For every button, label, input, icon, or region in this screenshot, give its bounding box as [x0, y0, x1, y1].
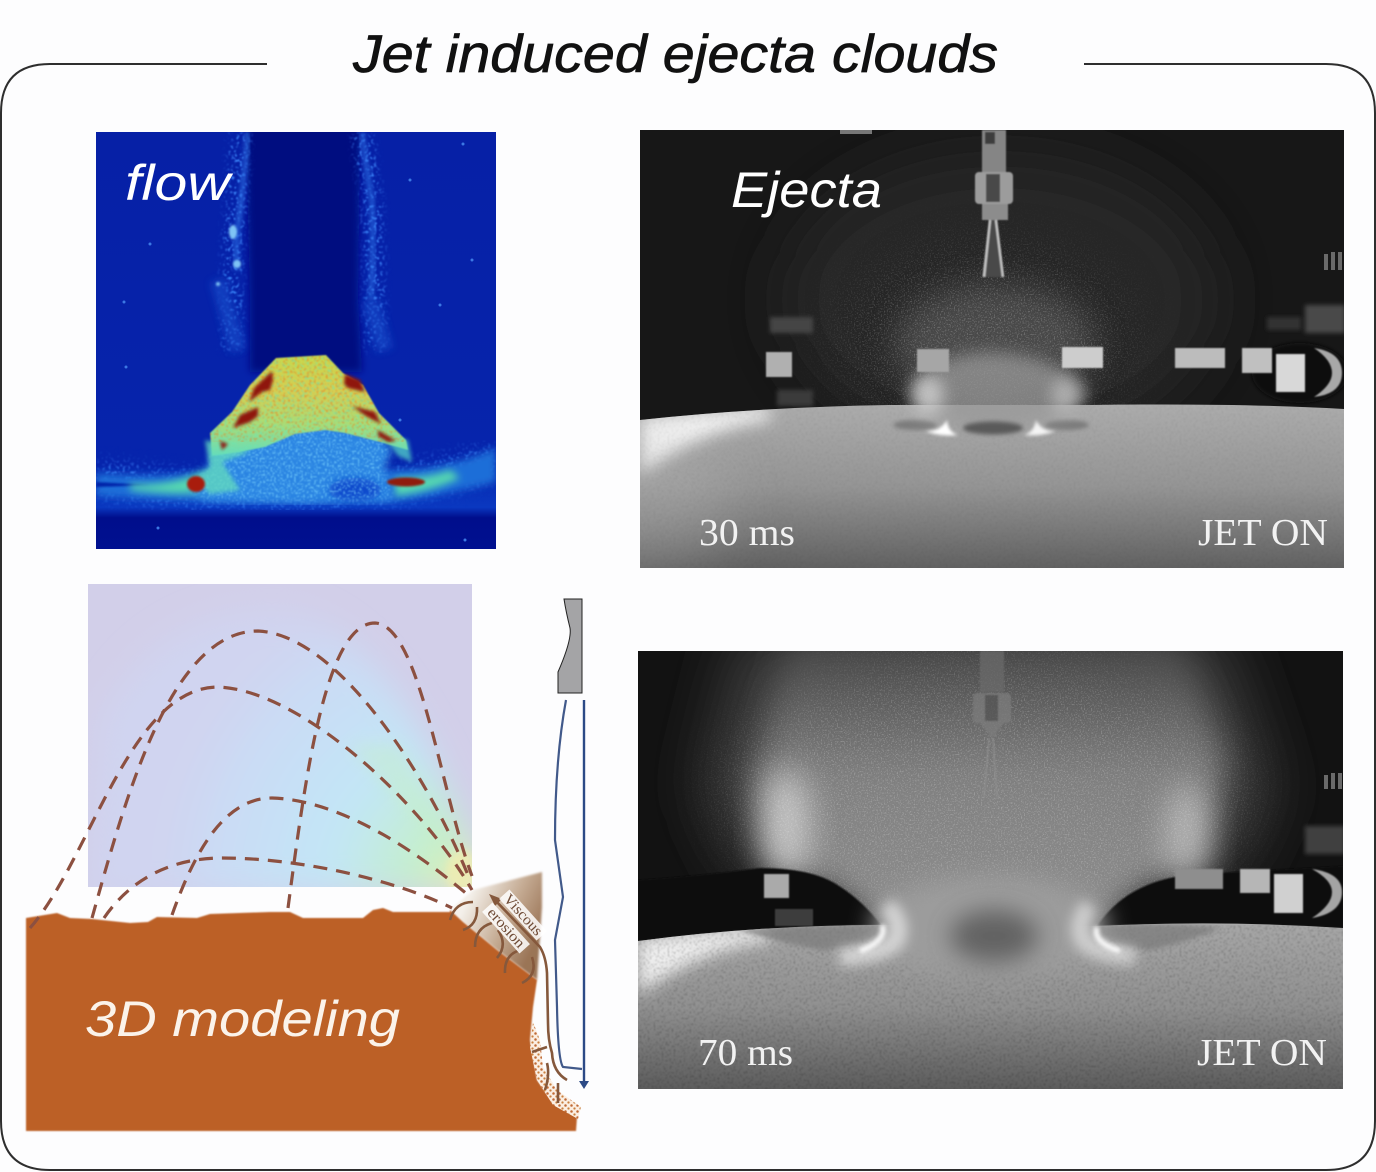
- trajectory 3: [288, 623, 472, 908]
- regolith ground: [26, 908, 577, 1131]
- flow label: flow: [125, 155, 233, 211]
- near-wall dark slit: [96, 482, 150, 487]
- cloud rim right: [1096, 927, 1120, 951]
- right edge stripes: [1324, 252, 1342, 270]
- cloud base over ground: [872, 877, 1108, 973]
- ground grain: [664, 424, 704, 444]
- plume outer diffuse glow: [218, 280, 385, 350]
- shiny bracket right 2: [1274, 874, 1303, 913]
- trajectory 1: [30, 687, 472, 928]
- trajectory 2: [92, 631, 470, 918]
- trajectory 4: [172, 798, 468, 915]
- small arrow 2: [463, 907, 477, 930]
- ejecta mound: [185, 352, 425, 505]
- shadow lens left: [740, 925, 881, 950]
- erosion flow arrows: [450, 899, 567, 1103]
- label text: erosion: [484, 905, 528, 952]
- rim glow left: [840, 905, 898, 957]
- dark chamber right: [1097, 866, 1343, 928]
- 3D modeling label: 3D modeling: [85, 991, 400, 1047]
- spray speckles: [816, 222, 1154, 406]
- flow background: [96, 132, 496, 549]
- lower branch 1: [532, 1047, 547, 1052]
- lower branch 2: [545, 1063, 548, 1090]
- arrow shaft: [583, 700, 585, 1082]
- cylinder crescent: [1314, 348, 1342, 397]
- upper yellow region: [209, 354, 408, 456]
- arrow head: [579, 1081, 589, 1089]
- dome shadow left: [893, 420, 937, 430]
- title: Jet induced ejecta clouds: [352, 25, 998, 84]
- bright lobe left: [762, 770, 810, 880]
- orange speckle: [210, 356, 404, 442]
- left bright edge: [640, 408, 770, 475]
- stray dots: [122, 142, 474, 542]
- large ejecta haze: [752, 640, 1226, 935]
- dark mount behind right hardware: [1252, 343, 1348, 403]
- plume streak left: [236, 132, 247, 270]
- panel: flow field: [96, 125, 496, 549]
- jet status: JET ON: [1197, 1032, 1327, 1074]
- panel: 3D modeling: [26, 584, 581, 1131]
- ejecta label: Ejecta: [731, 162, 882, 218]
- shadow lens right: [1097, 924, 1220, 950]
- near-wall green band: [130, 470, 460, 496]
- foot hot spot right: [387, 478, 425, 486]
- panel: ejecta 70 ms: [638, 630, 1345, 1089]
- erosion label strip: [481, 902, 530, 954]
- timestamp: 30 ms: [699, 512, 795, 554]
- bright dome lobe left: [912, 375, 944, 415]
- chamber background: [640, 130, 1344, 420]
- ground shading: [638, 924, 1343, 1089]
- left side lift: [640, 434, 724, 568]
- yellow fill: [209, 354, 408, 456]
- spray speckles: [638, 651, 1343, 1089]
- strip background: [482, 903, 530, 953]
- bright dome lobe right: [1051, 377, 1079, 413]
- small arrow 3: [475, 923, 492, 947]
- shiny bracket 2: [917, 349, 949, 372]
- chamber background: [638, 651, 1343, 1089]
- right edge stripes: [1324, 773, 1342, 789]
- plume bright dots: [216, 225, 241, 286]
- nozzle icon: [558, 599, 582, 693]
- right green fringe: [385, 438, 412, 462]
- shiny bracket 6: [1276, 354, 1305, 392]
- arrow head: [489, 894, 502, 906]
- shiny bracket left: [764, 874, 789, 898]
- dome glow: [912, 352, 1088, 428]
- dark chamber left: [638, 868, 881, 941]
- green ray: [350, 745, 470, 885]
- small arrow 5: [505, 950, 520, 973]
- shiny bracket 4: [1175, 348, 1225, 368]
- simulation background: [88, 584, 472, 887]
- lower left green fringe: [195, 440, 250, 494]
- shiny bracket 5: [1242, 348, 1272, 373]
- small arrow 4: [497, 930, 503, 958]
- upper centre lift: [782, 151, 1218, 406]
- upper right grey band: [1305, 826, 1345, 854]
- lower region fill: [189, 429, 395, 505]
- dark central jet core: [246, 125, 362, 372]
- label text: Viscous: [500, 891, 545, 939]
- left bright edge: [638, 927, 770, 995]
- timestamp: 70 ms: [698, 1032, 793, 1074]
- ground: [638, 923, 1343, 1089]
- viscous label strip: [498, 889, 547, 941]
- dashed ejecta trajectories: [30, 623, 472, 928]
- ground shading: [640, 409, 1090, 568]
- foot hot spot left: [187, 476, 205, 492]
- dark centre: [950, 910, 1038, 962]
- erosion wedge: [450, 872, 542, 980]
- crater dark centre: [963, 422, 1023, 434]
- shiny bracket 3: [1062, 347, 1103, 368]
- jet nozzle: [973, 651, 1011, 798]
- small arrow 6: [522, 957, 534, 983]
- shiny bracket right 1: [1240, 869, 1270, 893]
- dark red hot spots: [220, 371, 396, 450]
- ground: [640, 404, 1344, 568]
- bright spot left: [925, 420, 958, 436]
- blue jet centreline arrow: [579, 700, 589, 1089]
- simulation plume cone: [90, 610, 478, 900]
- lower blue region: [189, 429, 395, 505]
- spray glow: [895, 285, 1095, 405]
- jet nozzle: [975, 130, 1013, 277]
- small arrow 1: [450, 902, 473, 920]
- plume streak right: [362, 132, 373, 300]
- dome shadow right: [1045, 420, 1089, 430]
- lower hollow: [329, 478, 381, 502]
- grey hardware bands: [770, 305, 1345, 406]
- shiny bracket 1: [766, 352, 792, 377]
- wide dim haze: [700, 630, 1275, 880]
- rim glow right: [1080, 905, 1135, 956]
- near-wall flow band: [96, 448, 496, 502]
- cloud rim left: [860, 925, 883, 951]
- cylinder crescent: [1312, 869, 1342, 918]
- ground grain: [638, 925, 1343, 1089]
- lower left column: [775, 909, 813, 926]
- plume speckles: [96, 132, 496, 549]
- strip background: [499, 890, 547, 940]
- main wall jet: [494, 899, 567, 1080]
- lower branch 3: [557, 1083, 559, 1103]
- jet status: JET ON: [1198, 512, 1328, 554]
- stippled debris: [530, 1022, 581, 1119]
- bright lobe right: [1166, 785, 1210, 885]
- trajectory 5: [104, 858, 452, 918]
- green speckle: [212, 354, 402, 444]
- panel: ejecta 30 ms: [640, 130, 1344, 568]
- light speckle: [194, 430, 392, 504]
- shiny bracket mid: [1175, 869, 1223, 889]
- cone body: [90, 610, 475, 900]
- blue jet boundary curve: [555, 700, 582, 1069]
- top fittings: [840, 130, 872, 134]
- bright spot right: [1024, 420, 1056, 436]
- yellow apex: [446, 850, 478, 894]
